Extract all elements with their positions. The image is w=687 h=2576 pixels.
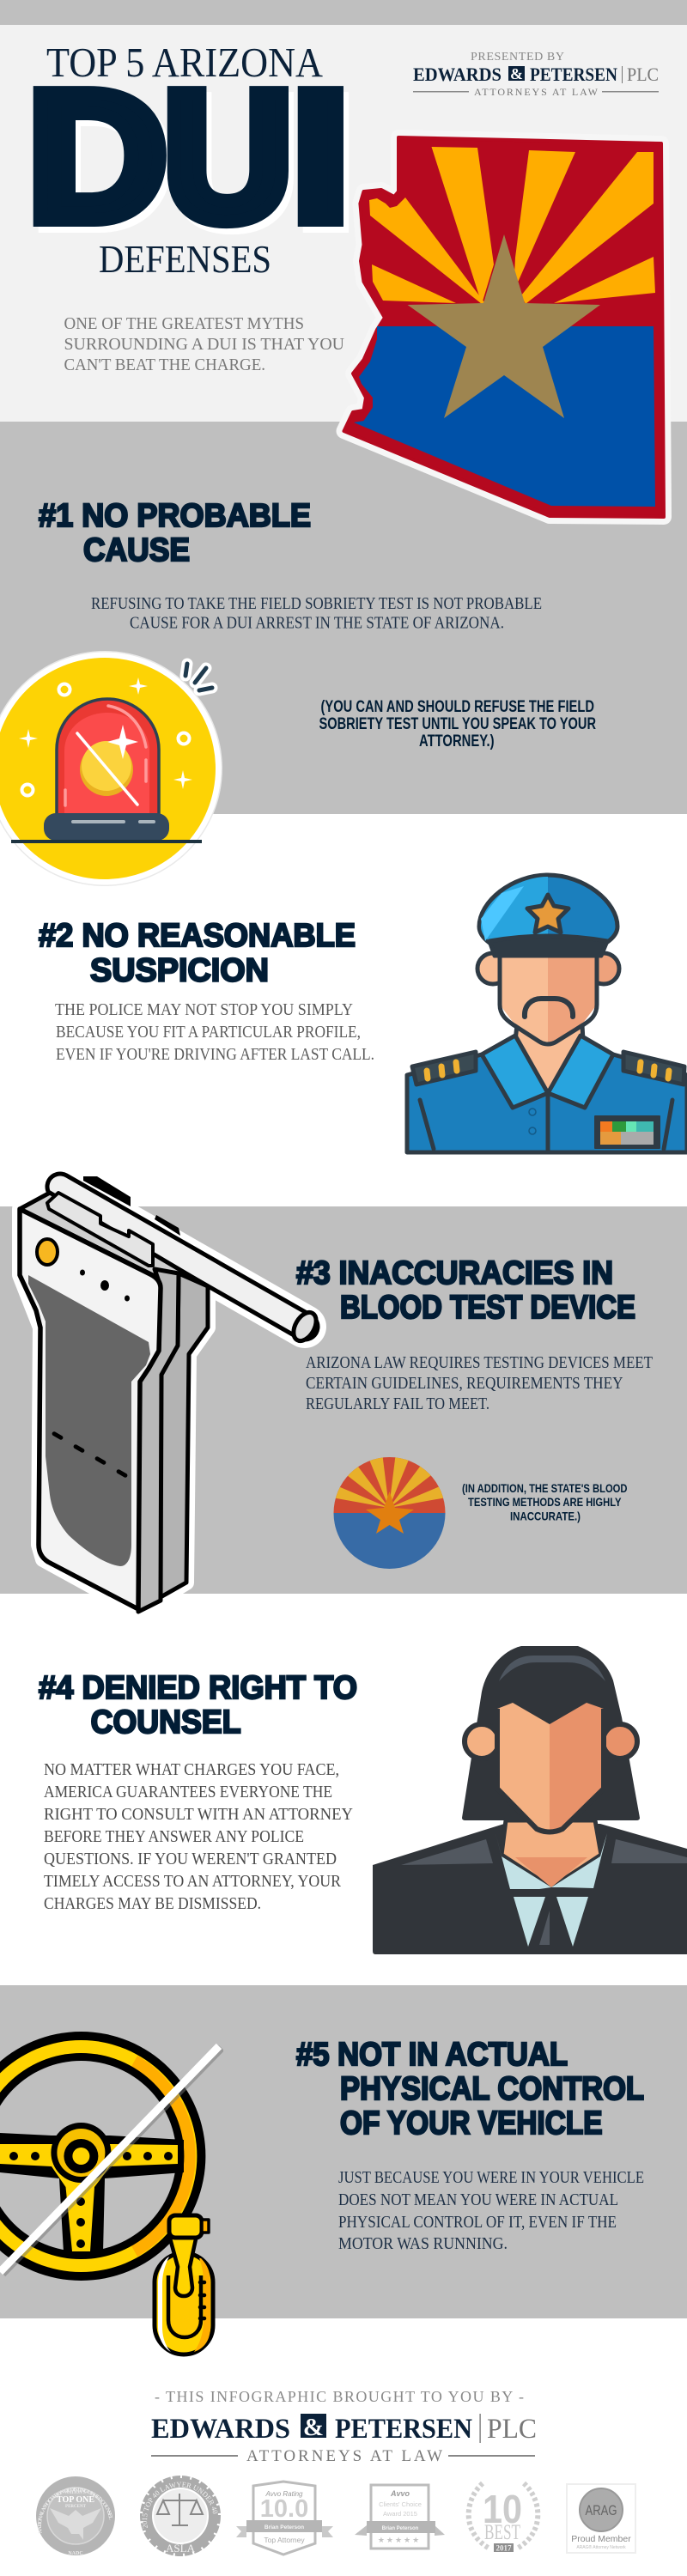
title: DUI: D [27,52,167,259]
neck and shirt [502,1820,601,1887]
heading #1: #1 NO PROBABLE [39,498,311,534]
panel: header [27,39,664,517]
badge: 10 best 2017: BEST [484,2521,520,2544]
title: DUI: I [292,52,350,259]
hat [479,875,617,943]
badge: avvo clients choice: Clients' Choice [379,2500,422,2508]
title: DUI: U [163,52,293,259]
logo: edwards and petersen: PETERSEN [335,2414,472,2445]
heading #2: #2 NO REASONABLE [39,918,356,954]
body text 5: PHYSICAL CONTROL OF IT, EVEN IF THE [338,2213,617,2232]
icon: steering wheel [0,2032,222,2281]
callout note 1: SOBRIETY TEST UNTIL YOU SPEAK TO YOUR [319,715,596,733]
heading #5: OF YOUR VEHICLE [340,2105,603,2142]
body text 4 [44,1760,353,1913]
badge: avvo clients choice: Brian Peterson [382,2526,419,2531]
badge: avvo rating 10.0: Brian Peterson [264,2524,304,2530]
body text 4: TIMELY ACCESS TO AN ATTORNEY, YOUR [44,1872,341,1891]
panel: defense 1 no probable cause [0,498,596,886]
band: section 1 background [0,422,687,814]
badge: avvo clients choice: Award 2015 [383,2510,417,2518]
footer tagline: - THIS INFOGRAPHIC BROUGHT TO YOU BY - [155,2388,524,2405]
badge: avvo rating 10.0: 10.0 [260,2495,308,2523]
heading #2: SUSPICION [90,953,269,989]
body text 2 [55,1000,374,1064]
logo: edwards and petersen: EDWARDS [151,2414,290,2445]
callout note 3 [462,1481,627,1523]
badge: national association of distinguished counsel: NATIONAL ASSOCIATION OF DISTINGUISHED COUNSEL [38,2488,113,2533]
badge: national association of distinguished counsel: PERCENT [65,2505,87,2509]
side faces [20,1193,208,1286]
body text 4: RIGHT TO CONSULT WITH AN ATTORNEY [44,1805,353,1824]
callout note 3: TESTING METHODS ARE HIGHLY [468,1495,622,1509]
band: section 4 background [0,1594,687,1985]
badge: arag proud member: Proud Member [571,2534,631,2544]
logo: edwards and petersen: ATTORNEYS AT LAW [246,2447,442,2465]
body text 5: DOES NOT MEAN YOU WERE IN ACTUAL [338,2190,618,2209]
intro text: CAN'T BEAT THE CHARGE. [64,355,265,374]
tube [60,1187,305,1327]
badge: arag proud member: ARAG® Attorney Network [576,2544,626,2550]
logo: edwards and petersen [151,2414,537,2465]
ears [465,1724,499,1759]
clip [47,1193,153,1266]
band: section 3 background [0,1206,687,1594]
badge: ASLA top 40 lawyer: 2015 TOP 40 LAWYER UNDER 40 [143,2482,218,2528]
body text 3: CERTAIN GUIDELINES, REQUIREMENTS THEY [306,1374,623,1393]
callout note 3: (IN ADDITION, THE STATE'S BLOOD [462,1481,627,1495]
face [497,1703,550,1831]
icon: siren [0,651,222,886]
callout note 1 [319,698,596,750]
epaulettes [412,1052,476,1084]
badge: avvo clients choice: ★★★★★ [378,2536,421,2544]
panel: defense 3 inaccuracies in blood test device [20,1176,653,1612]
body text 4: QUESTIONS. IF YOU WEREN'T GRANTED [44,1850,337,1868]
uniform body [407,1036,687,1152]
badge: ASLA top 40 lawyer: ASLA [166,2542,196,2555]
badge: national association of distinguished counsel: TOP ONE [57,2495,94,2505]
icon: gear shift [155,2215,213,2354]
title: DUI: D [33,58,173,265]
title: DUI: U [168,58,298,265]
badge: 10 best 2017 [469,2483,538,2552]
screen [28,1275,150,1566]
logo: presented by: PETERSEN [530,64,617,85]
intro text: SURROUNDING A DUI IS THAT YOU [64,335,344,354]
icon: arizona flag circle [333,1457,445,1569]
heading #3: #3 INACCURACIES IN [296,1255,613,1291]
heading #1: CAUSE [83,532,190,568]
logo: presented by: & [510,65,523,82]
icon: police officer [407,875,687,1152]
body text 4: AMERICA GUARANTEES EVERYONE THE [44,1783,332,1801]
heading #4 [39,1670,357,1741]
badge: arag proud member [567,2484,635,2553]
band: footer background [0,2318,687,2576]
heading #3: BLOOD TEST DEVICE [340,1290,635,1326]
panel: footer [36,2388,636,2556]
body text 2: EVEN IF YOU'RE DRIVING AFTER LAST CALL. [56,1045,374,1064]
intro text [64,314,344,374]
title: DUI [27,52,355,265]
body text 1: REFUSING TO TAKE THE FIELD SOBRIETY TEST IS NOT PROBABLE [91,594,542,613]
body text 3 [306,1353,653,1413]
body text 1 [91,594,542,632]
band: section 2 background [0,814,687,1206]
body text 1: CAUSE FOR A DUI ARREST IN THE STATE OF ARIZONA. [130,613,504,632]
suit [373,1824,687,1954]
band: top grey strip [0,0,687,25]
badge: national association of distinguished counsel: NATION'S [65,2491,86,2495]
badge: national association of distinguished counsel: NADC [68,2551,83,2556]
heading #2 [39,918,356,989]
body text 4: BEFORE THEY ANSWER ANY POLICE [44,1827,304,1846]
heading #4: COUNSEL [91,1704,241,1741]
logo: presented by: PRESENTED BY [471,51,564,64]
badge: avvo clients choice: Avvo [390,2489,410,2498]
badge: 10 best 2017: 10 [483,2487,522,2531]
badge: avvo rating 10.0 [236,2482,333,2555]
logo: presented by [413,51,659,98]
intro text: ONE OF THE GREATEST MYTHS [64,314,304,333]
title line: top 5 arizona: TOP 5 ARIZONA [46,39,324,86]
heading #5 [296,2037,644,2142]
callout note 1: ATTORNEY.) [419,732,495,750]
badge: national association of distinguished counsel [36,2476,115,2556]
hair [462,1646,640,1820]
badge: avvo rating 10.0: Top Attorney [264,2536,305,2544]
body text 5 [338,2168,644,2253]
spokes [0,2133,184,2252]
heading #4: #4 DENIED RIGHT TO [39,1670,357,1706]
title line: defenses: DEFENSES [99,237,271,281]
heading #3 [296,1255,635,1326]
heading #5: #5 NOT IN ACTUAL [296,2037,568,2073]
icon: arizona flag map [344,137,664,517]
panel: defense 5 not in actual physical control [0,2032,644,2354]
badge: 10 best 2017: 2017 [496,2543,512,2552]
badge: avvo rating 10.0: Avvo Rating [264,2490,303,2498]
body text 4: NO MATTER WHAT CHARGES YOU FACE, [44,1760,339,1779]
callout note 1: (YOU CAN AND SHOULD REFUSE THE FIELD [321,698,594,716]
logo: edwards and petersen: & [303,2414,324,2441]
light [37,1239,58,1265]
sticker outline [60,1187,305,1327]
badge: avvo clients choice [355,2485,445,2549]
band: section 5 background [0,1985,687,2318]
band: header background [0,25,687,422]
badge: ASLA top 40 lawyer [140,2476,221,2556]
body text 2: THE POLICE MAY NOT STOP YOU SIMPLY [55,1000,353,1019]
callout note 3: INACCURATE.) [510,1510,581,1523]
slash [3,2048,222,2274]
logo: edwards and petersen: PLC [487,2414,537,2445]
body text 5: MOTOR WAS RUNNING. [338,2234,508,2253]
panel: defense 4 denied right to counsel [39,1646,687,1954]
body text 4: CHARGES MAY BE DISMISSED. [44,1894,261,1913]
logo: presented by: EDWARDS [413,64,502,85]
hub [51,2123,111,2183]
body text 3: REGULARLY FAIL TO MEET. [306,1394,489,1413]
logo: presented by: ATTORNEYS AT LAW [474,86,599,98]
title: DUI: I [297,58,355,265]
front face [20,1209,161,1609]
icon: breathalyzer device [20,1176,321,1612]
heading #1 [39,498,311,568]
badge: arag proud member: ARAG [586,2502,617,2518]
panel: defense 2 no reasonable suspicion [39,875,687,1152]
body text 2: BECAUSE YOU FIT A PARTICULAR PROFILE, [56,1023,361,1042]
icon: attorney [373,1646,687,1954]
ears and face [477,953,508,984]
logo: presented by: PLC [627,64,659,85]
heading #5: PHYSICAL CONTROL [340,2071,644,2107]
